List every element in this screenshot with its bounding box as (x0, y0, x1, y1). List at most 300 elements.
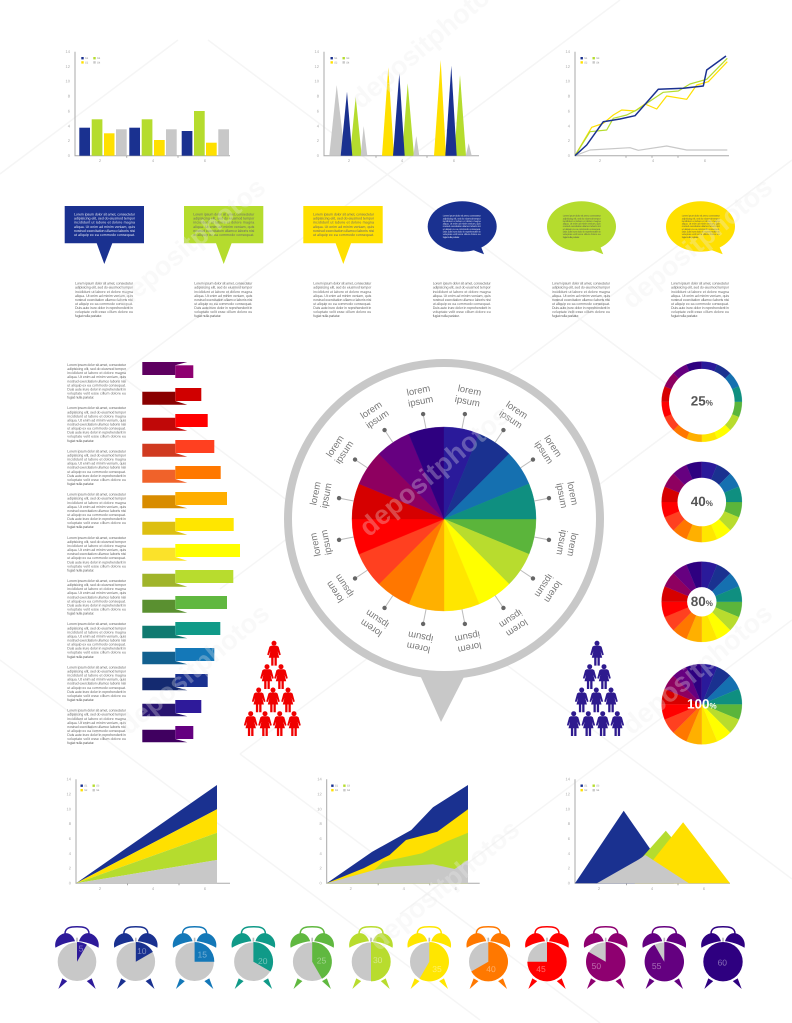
text block 3 (67, 449, 127, 486)
bar chart legend: S4 (97, 61, 101, 64)
text block 9: adipisicing elit, sed do eiusmod tempor (67, 713, 127, 717)
text block 3: incididunt ut labore et dolore magna (67, 458, 126, 462)
text block 3: ut aliquip ex ea commodo consequat. (67, 470, 126, 474)
alarm clock 5: 5 (79, 944, 84, 954)
icon: red people pyramid (244, 641, 301, 736)
text block under yellow rectangle: incididunt ut labore et dolore magna (313, 290, 371, 294)
speech bubble: blue (428, 201, 497, 254)
text block 8: voluptate velit esse cillum dolore eu (67, 694, 126, 698)
alarm clock 25: 25 (317, 956, 326, 966)
bar chart axes: 14 (66, 49, 71, 54)
callout text: Lorem ipsum dolor sit amet, consectetur (313, 212, 375, 216)
text block 5 (67, 536, 127, 572)
triangle chart legend: S1 (334, 57, 338, 60)
area chart axes: 4 (568, 851, 571, 856)
alarm clock 10: 10 (137, 946, 147, 956)
text block 8: aliqua. Ut enim ad minim veniam, quis (67, 678, 126, 682)
text block under yellow rectangle: adipisicing elit, sed do eiusmod tempor (313, 286, 372, 290)
bar chart legend: S1 (85, 57, 89, 60)
wheel labels: ipsum (407, 628, 434, 644)
callout: blue rectangle (65, 206, 144, 264)
mountains (575, 811, 730, 883)
text block under yellow bubble: fugiat nulla pariatur. (671, 314, 698, 318)
text block under green bubble (552, 282, 611, 318)
wheel labels: lorem (358, 616, 384, 639)
donut 40%: 40% (691, 494, 713, 509)
alarm clock 30: 30 (373, 955, 383, 965)
callout text: ut aliquip ex ea commodo consequat. (193, 233, 254, 237)
text block under green bubble: fugiat nulla pariatur. (552, 314, 579, 318)
triangles (329, 60, 472, 156)
callout text (193, 212, 255, 237)
text block under green bubble: ut aliquip ex ea commodo consequat. (552, 302, 610, 306)
bubble text: adipisicing elit, sed do eiusmod tempor (682, 217, 720, 220)
bubble text: Duis aute irure dolor in reprehenderit in (563, 230, 601, 234)
bubble text: incididunt ut labore et dolore magna (682, 220, 720, 223)
alarm clock 5 (55, 927, 99, 989)
line chart legend: S2 (584, 61, 588, 64)
alarm clock 50: 50 (592, 961, 601, 971)
callout text: nostrud exercitation ullamco laboris nisi (74, 229, 135, 233)
text block under blue rectangle: voluptate velit esse cillum dolore eu (75, 310, 133, 314)
ribbon bars (142, 362, 240, 742)
wheel labels: lorem (457, 639, 482, 655)
bubble text: fugiat nulla pariatur. (563, 236, 580, 239)
central location-pin wheel (288, 363, 600, 722)
bar chart axes: 4 (152, 158, 155, 163)
bubble text: aliqua. Ut enim ad minim veniam, quis (443, 223, 481, 226)
text block under yellow rectangle: voluptate velit esse cillum dolore eu (313, 310, 371, 314)
left text column (67, 363, 127, 745)
bubble text: voluptate velit esse cillum dolore eu (443, 233, 481, 236)
text block under yellow rectangle: ut aliquip ex ea commodo consequat. (313, 302, 371, 306)
wheel labels: lorem (406, 639, 431, 655)
area chart axes: 2 (319, 866, 322, 871)
text block under green rectangle: ut aliquip ex ea commodo consequat. (194, 302, 252, 306)
triangle chart axes (315, 49, 479, 163)
area chart legend: S4 (347, 789, 351, 792)
text block 9: incididunt ut labore et dolore magna (67, 717, 126, 721)
text block under blue bubble: voluptate velit esse cillum dolore eu (433, 310, 491, 314)
callout text: Lorem ipsum dolor sit amet, consectetur (193, 212, 255, 216)
areas (76, 785, 217, 883)
bar chart axes: 2 (99, 158, 102, 163)
text block 5: voluptate velit esse cillum dolore eu (67, 564, 126, 568)
bubble text: nostrud exercitation ullamco laboris nisi (563, 225, 601, 228)
line chart axes: 6 (568, 108, 571, 113)
wheel labels: lorem (504, 616, 529, 639)
area chart axes: 8 (69, 821, 72, 826)
text block 5: incididunt ut labore et dolore magna (67, 544, 126, 548)
area chart legend (331, 784, 351, 792)
bar chart axes (66, 49, 230, 163)
alarm clock 35 (407, 927, 451, 989)
area chart legend: S4 (96, 789, 100, 792)
text block under yellow bubble: Duis aute irure dolor in reprehenderit in (671, 306, 729, 310)
donut 40% (662, 462, 742, 542)
text block 3: Lorem ipsum dolor sit amet, consectetur (67, 449, 127, 453)
text block 8: adipisicing elit, sed do eiusmod tempor (67, 669, 127, 673)
area chart axes: 10 (317, 806, 322, 811)
bubble text: incididunt ut labore et dolore magna (563, 220, 601, 223)
wheel labels: ipsum (454, 394, 481, 410)
text block under green bubble: nostrud exercitation ullamco laboris nisi (552, 298, 610, 302)
text block 6: fugiat nulla pariatur. (67, 612, 95, 616)
alarm clock 45: 45 (536, 964, 546, 974)
text block 2: ut aliquip ex ea commodo consequat. (67, 427, 126, 431)
text block 9: ut aliquip ex ea commodo consequat. (67, 729, 126, 733)
bar chart axes: 0 (68, 153, 71, 158)
text block under blue rectangle: Duis aute irure dolor in reprehenderit in (75, 306, 133, 310)
pin pointer (420, 675, 465, 722)
wheel labels: lorem (541, 579, 564, 605)
triangle chart axes: 0 (317, 153, 320, 158)
text block 7: aliqua. Ut enim ad minim veniam, quis (67, 634, 126, 638)
area chart legend: S4 (596, 789, 600, 792)
area chart axes: 4 (69, 851, 72, 856)
area chart axes: 10 (566, 806, 571, 811)
line chart axes (566, 49, 729, 163)
callout text: adipisicing elit, sed do eiusmod tempor (313, 217, 375, 221)
text block 1: voluptate velit esse cillum dolore eu (67, 392, 126, 396)
line chart legend: S1 (584, 57, 588, 60)
text block 4: fugiat nulla pariatur. (67, 525, 95, 529)
text block under yellow rectangle: aliqua. Ut enim ad minim veniam, quis (313, 294, 372, 298)
text block under green rectangle: Lorem ipsum dolor sit amet, consectetur (194, 282, 253, 286)
area chart legend: S2 (335, 789, 339, 792)
area chart legend: S2 (84, 789, 88, 792)
watermark: depositphotos (113, 598, 275, 740)
mountain area chart (566, 777, 730, 891)
area chart axes: 12 (566, 791, 571, 796)
text block 2: voluptate velit esse cillum dolore eu (67, 435, 126, 439)
text block 7: Lorem ipsum dolor sit amet, consectetur (67, 622, 127, 626)
alarm clock 15: 15 (198, 949, 207, 959)
alarm clock 25 (290, 927, 334, 989)
text block 8 (67, 665, 127, 702)
text block under green rectangle: adipisicing elit, sed do eiusmod tempor (194, 286, 253, 290)
bubble text (563, 215, 601, 239)
line chart axes: 0 (568, 153, 571, 158)
callout text: aliqua. Ut enim ad minim veniam, quis (313, 225, 374, 229)
callout text: nostrud exercitation ullamco laboris nisi (313, 229, 374, 233)
bar chart axes: 4 (68, 123, 71, 128)
line chart axes: 4 (652, 158, 655, 163)
line chart axes: 2 (599, 158, 602, 163)
text block 4: incididunt ut labore et dolore magna (67, 501, 126, 505)
text block under yellow bubble (671, 282, 730, 318)
bubble text: Lorem ipsum dolor sit amet, consectetur (443, 215, 481, 218)
wheel labels: ipsum (553, 529, 569, 556)
wheel labels (308, 383, 580, 655)
triangle chart legend: S3 (346, 57, 350, 60)
callout text: aliqua. Ut enim ad minim veniam, quis (74, 225, 135, 229)
line chart legend: S4 (596, 61, 600, 64)
icon: blue people pyramid (567, 641, 624, 736)
area chart axes: 0 (319, 881, 322, 886)
text block under green bubble: adipisicing elit, sed do eiusmod tempor (552, 286, 611, 290)
text block under blue rectangle: adipisicing elit, sed do eiusmod tempor (75, 286, 134, 290)
text block under green bubble: Lorem ipsum dolor sit amet, consectetur (552, 282, 611, 286)
text block 3: Duis aute irure dolor in reprehenderit in (67, 474, 126, 478)
text block under green rectangle: incididunt ut labore et dolore magna (194, 290, 252, 294)
text block 5: ut aliquip ex ea commodo consequat. (67, 556, 126, 560)
wheel labels: ipsum (497, 408, 524, 431)
text block 2: adipisicing elit, sed do eiusmod tempor (67, 410, 127, 414)
triangle chart axes: 8 (317, 94, 320, 99)
text block 6: incididunt ut labore et dolore magna (67, 587, 126, 591)
area chart legend: S3 (96, 785, 100, 788)
line chart legend (580, 57, 600, 64)
area chart axes: 2 (350, 886, 353, 891)
area chart axes: 6 (455, 886, 458, 891)
triangle chart axes: 14 (315, 49, 320, 54)
triangle chart axes: 4 (401, 158, 404, 163)
bubble text: voluptate velit esse cillum dolore eu (682, 233, 720, 236)
triangle chart legend (330, 57, 350, 64)
area chart legend (80, 784, 100, 792)
text block 6: Lorem ipsum dolor sit amet, consectetur (67, 579, 127, 583)
bubble text: nostrud exercitation ullamco laboris nisi (443, 225, 481, 228)
area chart axes: 14 (67, 777, 72, 782)
text block under blue bubble: incididunt ut labore et dolore magna (433, 290, 491, 294)
text block 1: adipisicing elit, sed do eiusmod tempor (67, 367, 127, 371)
text block 7: ut aliquip ex ea commodo consequat. (67, 643, 126, 647)
text block 1: ut aliquip ex ea commodo consequat. (67, 383, 126, 387)
text block under blue rectangle (75, 282, 134, 318)
bars (79, 111, 229, 156)
area chart axes: 6 (703, 886, 706, 891)
text block under yellow bubble: aliqua. Ut enim ad minim veniam, quis (671, 294, 729, 298)
text block 7: adipisicing elit, sed do eiusmod tempor (67, 626, 127, 630)
text block 9: fugiat nulla pariatur. (67, 741, 95, 745)
alarm clock 60 (701, 927, 745, 989)
text block under blue rectangle: ut aliquip ex ea commodo consequat. (75, 302, 133, 306)
watermark: depositphotos (363, 814, 525, 956)
area chart axes: 12 (67, 791, 72, 796)
text block 8: ut aliquip ex ea commodo consequat. (67, 686, 126, 690)
bubble text: aliqua. Ut enim ad minim veniam, quis (563, 223, 601, 226)
area chart axes: 4 (152, 886, 155, 891)
text block under green bubble: incididunt ut labore et dolore magna (552, 290, 610, 294)
area chart axes (67, 777, 230, 891)
bubble text: aliqua. Ut enim ad minim veniam, quis (682, 223, 720, 226)
text block under yellow bubble: nostrud exercitation ullamco laboris nisi (671, 298, 729, 302)
wheel labels: lorem (457, 383, 482, 399)
text block under blue rectangle: aliqua. Ut enim ad minim veniam, quis (75, 294, 133, 298)
area chart axes: 6 (568, 836, 571, 841)
text block 9: voluptate velit esse cillum dolore eu (67, 737, 126, 741)
text block under yellow bubble: adipisicing elit, sed do eiusmod tempor (671, 286, 730, 290)
area chart axes: 14 (317, 777, 322, 782)
text block 2 (67, 406, 127, 443)
area chart legend: S2 (584, 789, 588, 792)
area chart legend: S1 (584, 785, 588, 788)
speech bubble: green (547, 201, 616, 254)
callout text: nostrud exercitation ullamco laboris nisi (193, 229, 254, 233)
alarm clock 50 (584, 927, 628, 989)
line chart axes: 2 (568, 138, 571, 143)
text block under yellow rectangle (313, 282, 372, 318)
areas (327, 785, 468, 883)
text block 9: Duis aute irure dolor in reprehenderit in (67, 733, 126, 737)
wheel labels: lorem (359, 399, 384, 422)
text block 6: aliqua. Ut enim ad minim veniam, quis (67, 591, 126, 595)
wheel labels: lorem (504, 399, 530, 422)
text block 7 (67, 622, 127, 659)
text block 2: Lorem ipsum dolor sit amet, consectetur (67, 406, 127, 410)
callout text: aliqua. Ut enim ad minim veniam, quis (193, 225, 255, 229)
text block 5: fugiat nulla pariatur. (67, 568, 95, 572)
area chart axes: 8 (319, 821, 322, 826)
text block 8: nostrud exercitation ullamco laboris nisi (67, 682, 126, 686)
text block under yellow bubble: incididunt ut labore et dolore magna (671, 290, 729, 294)
text block 4 (67, 493, 127, 529)
text block 6: voluptate velit esse cillum dolore eu (67, 608, 126, 612)
text block 8: incididunt ut labore et dolore magna (67, 674, 126, 678)
text block 2: fugiat nulla pariatur. (67, 439, 95, 443)
text block 8: fugiat nulla pariatur. (67, 698, 95, 702)
text block under yellow rectangle: fugiat nulla pariatur. (313, 314, 341, 318)
bar chart axes: 2 (68, 138, 71, 143)
alarm clock 20: 20 (258, 956, 268, 966)
bubble text: fugiat nulla pariatur. (682, 236, 699, 239)
wheel labels: lorem (564, 532, 580, 557)
text block 5: adipisicing elit, sed do eiusmod tempor (67, 540, 127, 544)
text block 3: adipisicing elit, sed do eiusmod tempor (67, 453, 127, 457)
text block 6: ut aliquip ex ea commodo consequat. (67, 599, 126, 603)
text block 9: aliqua. Ut enim ad minim veniam, quis (67, 721, 126, 725)
text block 1: incididunt ut labore et dolore magna (67, 371, 126, 375)
area chart axes: 12 (317, 791, 322, 796)
text block under yellow rectangle: Lorem ipsum dolor sit amet, consectetur (313, 282, 372, 286)
text block under green bubble: voluptate velit esse cillum dolore eu (552, 310, 610, 314)
donut 25% (662, 362, 742, 442)
alarm clock 55 (642, 927, 686, 989)
text block under green rectangle: nostrud exercitation ullamco laboris nisi (194, 298, 252, 302)
text block under green bubble: aliqua. Ut enim ad minim veniam, quis (552, 294, 610, 298)
bar chart axes: 10 (66, 79, 71, 84)
callout text: adipisicing elit, sed do eiusmod tempor (74, 217, 136, 221)
pin ring (288, 363, 600, 675)
text block 7: incididunt ut labore et dolore magna (67, 630, 126, 634)
text block 3: voluptate velit esse cillum dolore eu (67, 478, 126, 482)
text block 6: Duis aute irure dolor in reprehenderit in (67, 603, 126, 607)
text block under green rectangle: aliqua. Ut enim ad minim veniam, quis (194, 294, 253, 298)
bar chart axes: 6 (68, 108, 71, 113)
bar chart axes: 8 (68, 94, 71, 99)
watermark: depositphotos (109, 172, 271, 314)
line chart (566, 49, 729, 163)
area chart axes: 4 (319, 851, 322, 856)
callout text: ut aliquip ex ea commodo consequat. (313, 233, 374, 237)
wheel labels: ipsum (454, 628, 481, 644)
alarm clock 40 (466, 927, 510, 989)
bubble text: Duis aute irure dolor in reprehenderit in (682, 230, 720, 234)
area chart legend: S1 (335, 785, 339, 788)
alarm clock 60: 60 (718, 958, 727, 968)
bar chart axes: 12 (66, 64, 71, 69)
watermark: depositphotos (353, 400, 515, 542)
line chart axes: 12 (566, 64, 571, 69)
text block under yellow rectangle: nostrud exercitation ullamco laboris nisi (313, 298, 371, 302)
text block 9 (67, 709, 127, 745)
triangle chart axes: 4 (317, 123, 320, 128)
text block 4: ut aliquip ex ea commodo consequat. (67, 513, 126, 517)
wheel labels: ipsum (333, 439, 356, 466)
donut 80%: 80% (691, 594, 713, 609)
triangle chart axes: 2 (317, 138, 320, 143)
text block under blue bubble: Lorem ipsum dolor sit amet, consectetur (433, 282, 491, 286)
text block 7: fugiat nulla pariatur. (67, 655, 95, 659)
text block under yellow rectangle: Duis aute irure dolor in reprehenderit in (313, 306, 371, 310)
callout: green rectangle (184, 206, 263, 264)
callout text (74, 212, 136, 237)
triangle chart legend: S2 (334, 61, 338, 64)
alarm clock 55: 55 (652, 961, 662, 971)
area chart axes: 0 (69, 881, 72, 886)
donut 80% (662, 562, 742, 642)
callout text: incididunt ut labore et dolore magna (313, 221, 374, 225)
text block 4: adipisicing elit, sed do eiusmod tempor (67, 497, 127, 501)
bubble text: Duis aute irure dolor in reprehenderit in (443, 230, 481, 234)
text block under blue bubble: Duis aute irure dolor in reprehenderit in (433, 306, 491, 310)
area chart axes (317, 777, 480, 891)
area chart legend: S1 (84, 785, 88, 788)
text block 5: Duis aute irure dolor in reprehenderit in (67, 560, 126, 564)
text block 3: nostrud exercitation ullamco laboris nisi (67, 466, 126, 470)
text block under green bubble: Duis aute irure dolor in reprehenderit in (552, 306, 610, 310)
area chart legend (580, 784, 600, 792)
line chart axes: 6 (704, 158, 707, 163)
callout text: ut aliquip ex ea commodo consequat. (74, 233, 135, 237)
wheel labels: ipsum (319, 482, 335, 509)
text block under blue bubble (433, 282, 491, 318)
text block 3: fugiat nulla pariatur. (67, 482, 95, 486)
bubble text: ut aliquip ex ea commodo consequat. (682, 228, 720, 231)
wheel labels: ipsum (553, 482, 569, 509)
text block 7: nostrud exercitation ullamco laboris nisi (67, 639, 126, 643)
bar chart (66, 49, 230, 163)
line chart axes: 4 (568, 123, 571, 128)
text block 7: Duis aute irure dolor in reprehenderit in (67, 647, 126, 651)
text block under yellow bubble: ut aliquip ex ea commodo consequat. (671, 302, 729, 306)
alarm clock 40: 40 (486, 964, 496, 974)
watermark (109, 0, 778, 956)
wheel labels: ipsum (333, 572, 356, 599)
text block 4: aliqua. Ut enim ad minim veniam, quis (67, 505, 126, 509)
bubble text: nostrud exercitation ullamco laboris nisi (682, 225, 720, 228)
text block under blue rectangle: nostrud exercitation ullamco laboris nisi (75, 298, 133, 302)
text block 2: incididunt ut labore et dolore magna (67, 414, 126, 418)
text block under blue bubble: fugiat nulla pariatur. (433, 314, 460, 318)
alarm clock 45 (525, 927, 569, 989)
text block 3: aliqua. Ut enim ad minim veniam, quis (67, 462, 126, 466)
wheel labels: lorem (541, 434, 564, 459)
text block 2: aliqua. Ut enim ad minim veniam, quis (67, 418, 126, 422)
pie 100%: 100% (687, 696, 717, 712)
wheel labels: lorem (324, 433, 347, 459)
area chart axes: 14 (566, 777, 571, 782)
text block 7: voluptate velit esse cillum dolore eu (67, 651, 126, 655)
text block 8: Lorem ipsum dolor sit amet, consectetur (67, 665, 127, 669)
wheel labels: lorem (406, 383, 431, 399)
bar chart legend (81, 57, 101, 64)
bubble text: Lorem ipsum dolor sit amet, consectetur (563, 215, 601, 218)
area chart legend: S3 (347, 785, 351, 788)
callout text: incididunt ut labore et dolore magna (193, 221, 254, 225)
callout text (313, 212, 375, 237)
